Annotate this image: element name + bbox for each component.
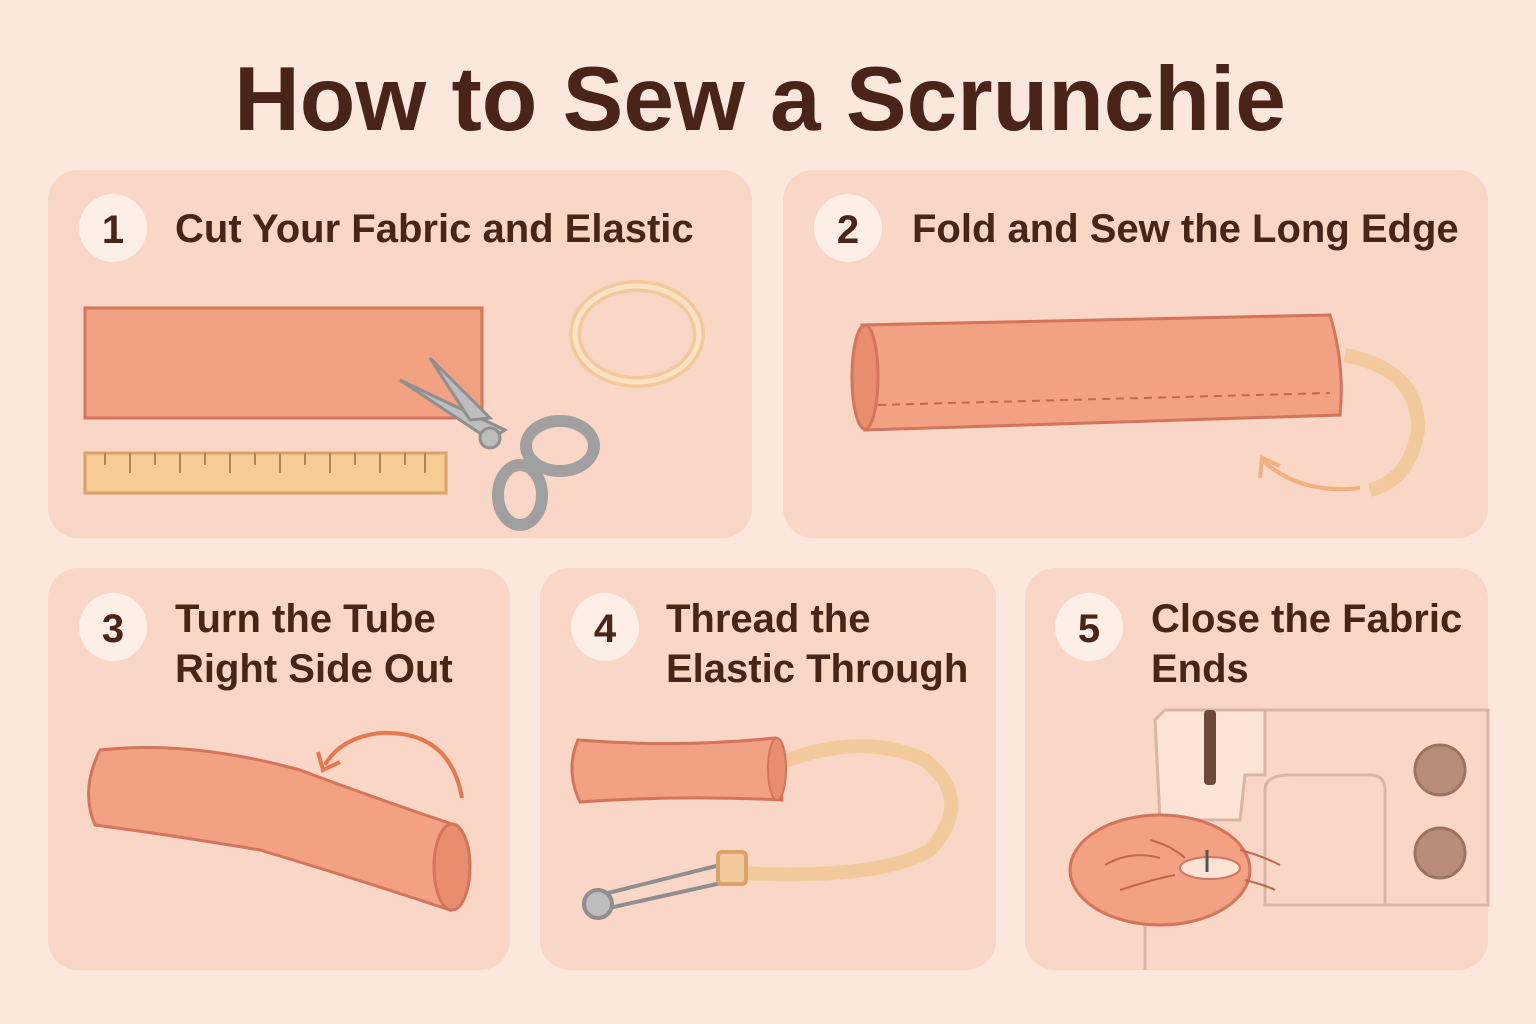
short tube [572,738,786,802]
icon: safety pin [584,852,746,918]
number badge 2: 2 [837,208,859,252]
sewing machine [1145,710,1488,970]
heading 3: Turn the Tube [175,597,436,641]
panel: step 4 [540,568,996,970]
heading 5: Close the Fabric [1151,597,1462,641]
number badge 1: 1 [102,208,124,252]
ruler [85,453,446,493]
heading 3: Right Side Out [175,647,453,691]
heading 5: Ends [1151,647,1249,691]
heading 1: Cut Your Fabric and Elastic [175,207,694,251]
number badge 4: 4 [594,607,617,651]
number badge 2 [814,194,882,262]
heading 4: Thread the [666,597,870,641]
fabric tube [852,315,1341,430]
heading 2: Fold and Sew the Long Edge [912,207,1459,251]
number badge 4 [571,593,639,661]
number badge 5 [1055,593,1123,661]
panel: step 5 [1025,568,1488,970]
panel: step 2 [783,170,1488,538]
fabric rectangle [85,308,482,418]
icon: scissors [400,358,594,525]
elastic strand [740,746,951,874]
arrow: curved [318,733,462,798]
panel: step 3 [48,568,510,970]
number badge 3 [79,593,147,661]
panel: step 1 [48,170,752,538]
title: How to Sew a Scrunchie [234,49,1286,150]
number badge 5: 5 [1078,607,1100,651]
number badge 3: 3 [102,607,124,651]
number badge 1 [79,194,147,262]
elastic strand and arrow [1260,355,1418,490]
icon: elastic ring [575,286,699,382]
heading 4: Elastic Through [666,647,968,691]
scrunchie [1070,815,1280,925]
turned tube [89,748,470,910]
